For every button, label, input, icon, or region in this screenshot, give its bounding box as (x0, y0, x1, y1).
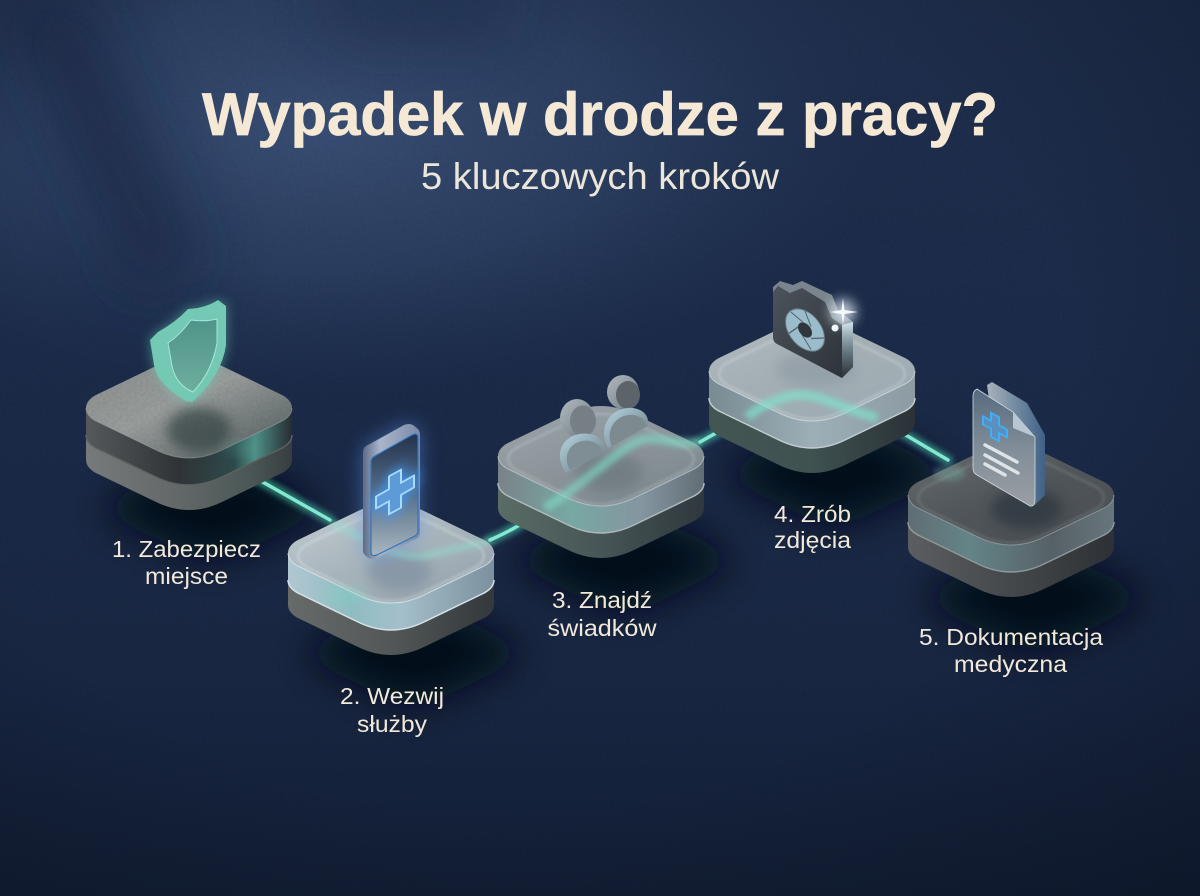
icon: phone with medical cross (363, 424, 420, 559)
icon: shield (150, 300, 226, 402)
icon: medical document (973, 382, 1045, 506)
platform 4: frosted glass (709, 321, 915, 473)
platform shadows (109, 423, 1137, 703)
label: step 1 (112, 536, 261, 589)
label: step 3 (548, 587, 658, 641)
connector: step 2 to 3 (490, 508, 545, 540)
label: step 4 (774, 501, 852, 553)
label: step 1: 1. Zabezpiecz (112, 536, 261, 562)
label: step 2: 2. Wezwij (340, 683, 444, 709)
label: step 4: 4. Zrób (774, 501, 851, 527)
connector: step 4 to 5 (877, 418, 948, 460)
platform 1: concrete (86, 358, 292, 510)
label: step 5: 5. Dokumentacja (919, 624, 1104, 650)
platform 5: dark glass (908, 445, 1114, 597)
connector: step 3 to 4 (700, 415, 748, 442)
title: Wypadek w drodze z pracy? (202, 81, 998, 148)
label: step 4: zdjęcia (774, 527, 852, 553)
icon: camera (773, 281, 858, 378)
platform 2: glass (288, 503, 494, 655)
label: step 3: świadków (548, 615, 658, 641)
label: step 1: miejsce (145, 563, 228, 589)
platform 3: frosted glass (498, 406, 704, 558)
icon: two people (560, 375, 648, 473)
subtitle: 5 kluczowych kroków (421, 156, 779, 197)
label: step 3: 3. Znajdź (552, 587, 652, 613)
connector: step 1 to 2 (245, 472, 330, 520)
label: step 5: medyczna (954, 651, 1068, 677)
label: step 2: służby (357, 711, 427, 737)
label: step 5 (919, 624, 1104, 677)
label: step 2 (340, 683, 444, 737)
